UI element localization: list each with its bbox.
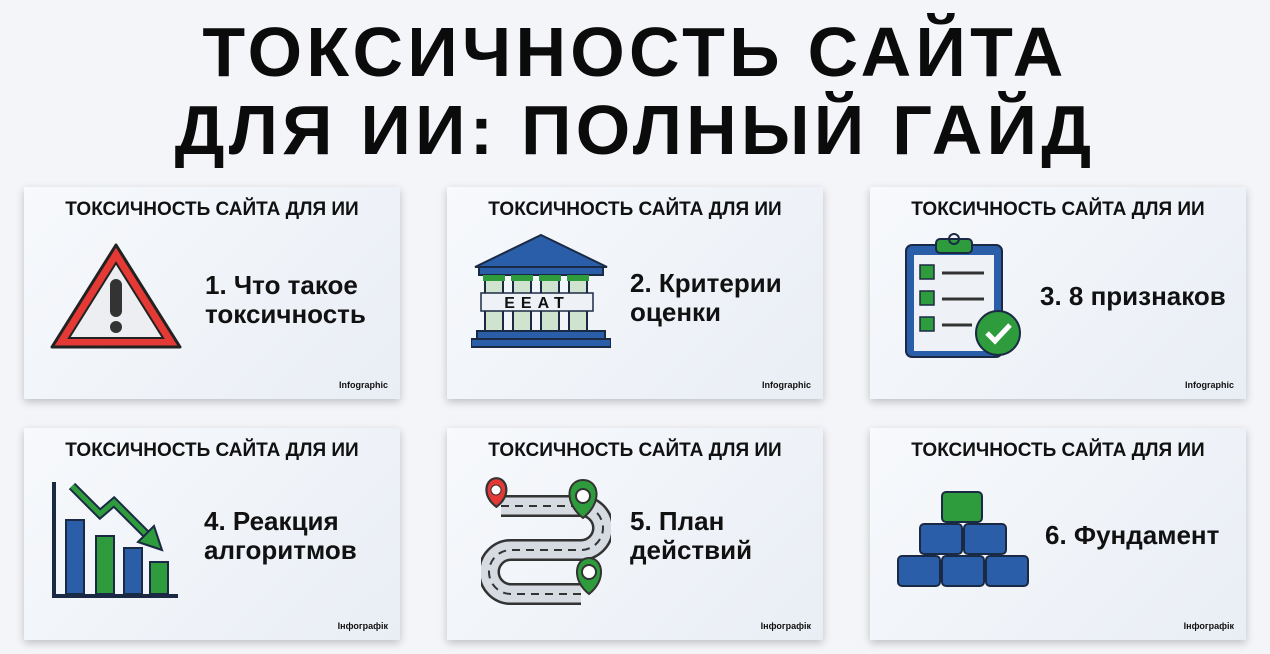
icon: warning bbox=[50, 243, 182, 348]
brand: Інфографік bbox=[1184, 621, 1234, 631]
label: действий bbox=[630, 535, 752, 565]
label: 4. Реакция bbox=[204, 506, 339, 536]
label bbox=[205, 270, 366, 329]
brand: Infographic bbox=[1185, 380, 1234, 390]
panel: 5 bbox=[447, 428, 823, 640]
panel header: ТОКСИЧНОСТЬ САЙТА ДЛЯ ИИ bbox=[488, 199, 782, 220]
brand: Інфографік bbox=[761, 621, 811, 631]
panel: 2 bbox=[447, 187, 823, 399]
icon: block pyramid bbox=[897, 491, 1029, 587]
brand: Інфографік bbox=[338, 621, 388, 631]
label: токсичность bbox=[205, 299, 366, 329]
label bbox=[204, 506, 357, 565]
title: ДЛЯ ИИ: ПОЛНЫЙ ГАЙД bbox=[175, 91, 1095, 169]
brand: Infographic bbox=[762, 380, 811, 390]
panel header: ТОКСИЧНОСТЬ САЙТА ДЛЯ ИИ bbox=[911, 199, 1205, 220]
label: 6. Фундамент bbox=[1045, 520, 1219, 550]
brand: Infographic bbox=[339, 380, 388, 390]
panel header: ТОКСИЧНОСТЬ САЙТА ДЛЯ ИИ bbox=[65, 199, 359, 220]
label: 2. Критерии bbox=[630, 268, 782, 298]
icon: EEAT temple: EEAT bbox=[504, 295, 570, 312]
label bbox=[630, 506, 752, 565]
label: 5. План bbox=[630, 506, 724, 536]
icon: roadmap bbox=[481, 477, 611, 605]
panel header: ТОКСИЧНОСТЬ САЙТА ДЛЯ ИИ bbox=[911, 440, 1205, 461]
icon: EEAT temple bbox=[471, 234, 611, 348]
label: 1. Что такое bbox=[205, 270, 358, 300]
title: ТОКСИЧНОСТЬ САЙТА bbox=[202, 13, 1068, 91]
title bbox=[175, 13, 1095, 169]
label bbox=[630, 268, 782, 327]
panel header: ТОКСИЧНОСТЬ САЙТА ДЛЯ ИИ bbox=[488, 440, 782, 461]
panel: 3 bbox=[870, 187, 1246, 399]
panel: 4 bbox=[24, 428, 400, 640]
panel: 6 bbox=[870, 428, 1246, 640]
panel header: ТОКСИЧНОСТЬ САЙТА ДЛЯ ИИ bbox=[65, 440, 359, 461]
label: 3. 8 признаков bbox=[1040, 281, 1226, 311]
panel: 1 bbox=[24, 187, 400, 399]
label: оценки bbox=[630, 297, 721, 327]
icon: checklist bbox=[905, 233, 1021, 358]
icon: falling chart bbox=[52, 482, 178, 598]
label: алгоритмов bbox=[204, 535, 357, 565]
